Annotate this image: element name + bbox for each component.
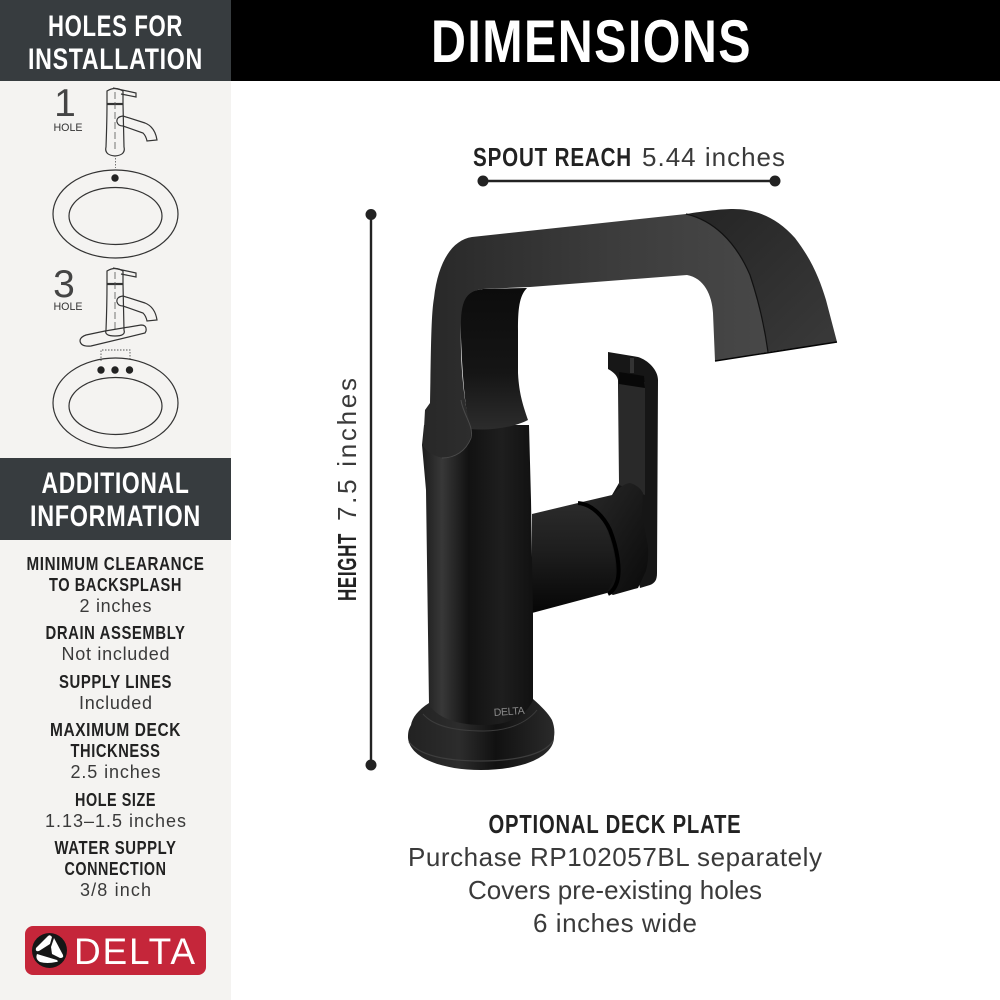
title banner: dimensions: [231, 0, 1000, 81]
icon: 1 hole installation: [53, 82, 178, 258]
text block: optional deck plate: Covers pre-existing holes: [468, 875, 762, 905]
heading: holes for installation: INSTALLATION: [28, 43, 203, 76]
icon: 3 hole installation: [53, 263, 178, 448]
text block: minimum clearance: TO BACKSPLASH: [49, 575, 182, 595]
text block: drain assembly: DRAIN ASSEMBLY: [46, 623, 186, 643]
dimension: spout reach: 5.44 inches: [642, 142, 785, 172]
text block: hole size: [45, 790, 186, 831]
text block: minimum clearance: 2 inches: [80, 596, 152, 616]
heading: holes for installation: HOLES FOR: [48, 10, 183, 43]
icon: 3 hole installation: 3: [53, 263, 75, 306]
text block: maximum deck thickness: [50, 720, 181, 782]
text block: optional deck plate: OPTIONAL DECK PLATE: [488, 809, 742, 839]
text block: minimum clearance: [26, 554, 204, 616]
heading: holes for installation: [0, 0, 231, 81]
heading: additional information: INFORMATION: [30, 500, 201, 533]
text block: maximum deck thickness: THICKNESS: [70, 741, 160, 761]
icon: 1 hole installation: 1: [54, 82, 76, 125]
dimension: spout reach: SPOUT REACH: [473, 142, 632, 172]
text block: hole size: HOLE SIZE: [75, 790, 156, 810]
product: faucet: [408, 209, 837, 770]
text block: supply lines: SUPPLY LINES: [59, 672, 172, 692]
title banner: dimensions: DIMENSIONS: [431, 8, 752, 75]
icon: 1 hole installation: HOLE: [54, 122, 82, 134]
text block: maximum deck thickness: MAXIMUM DECK: [50, 720, 181, 740]
faucet handle arm: [532, 483, 648, 613]
text block: water supply connection: CONNECTION: [64, 859, 166, 879]
panel: left sidebar: [0, 0, 231, 1000]
dimension: height: 7.5 inches: [332, 378, 362, 521]
heading: additional information: [0, 458, 231, 540]
faucet spout arm: [423, 214, 768, 458]
text block: water supply connection: WATER SUPPLY: [54, 838, 176, 858]
logo: delta: [25, 926, 206, 975]
text block: supply lines: Included: [79, 693, 152, 713]
text block: water supply connection: [54, 838, 176, 900]
text block: supply lines: [59, 672, 172, 713]
dimension: height: HEIGHT: [332, 533, 362, 601]
dimension: height: [332, 209, 376, 770]
text block: drain assembly: Not included: [62, 644, 170, 664]
faucet spout underside: [715, 342, 837, 361]
faucet shoulder edge: [442, 400, 472, 458]
text block: drain assembly: [46, 623, 186, 664]
text block: hole size: 1.13–1.5 inches: [45, 811, 186, 831]
faucet logo mark: DELTA: [493, 705, 525, 719]
text block: water supply connection: 3/8 inch: [80, 880, 151, 900]
text block: optional deck plate: [408, 809, 822, 938]
text block: minimum clearance: MINIMUM CLEARANCE: [26, 554, 204, 574]
faucet base: [408, 699, 554, 770]
faucet inner neck: [460, 288, 528, 430]
icon: 3 hole installation: HOLE: [54, 301, 82, 313]
faucet body: [422, 425, 533, 725]
text block: optional deck plate: 6 inches wide: [533, 908, 697, 938]
faucet handle lever: [608, 352, 658, 588]
faucet spout tip: [686, 209, 837, 352]
faucet spout edge: [686, 214, 768, 352]
logo: delta: DELTA: [74, 931, 195, 972]
dimension: spout reach: [473, 142, 785, 186]
text block: optional deck plate: Purchase RP102057BL separately: [408, 842, 822, 872]
text block: maximum deck thickness: 2.5 inches: [70, 762, 160, 782]
heading: additional information: ADDITIONAL: [42, 467, 190, 500]
